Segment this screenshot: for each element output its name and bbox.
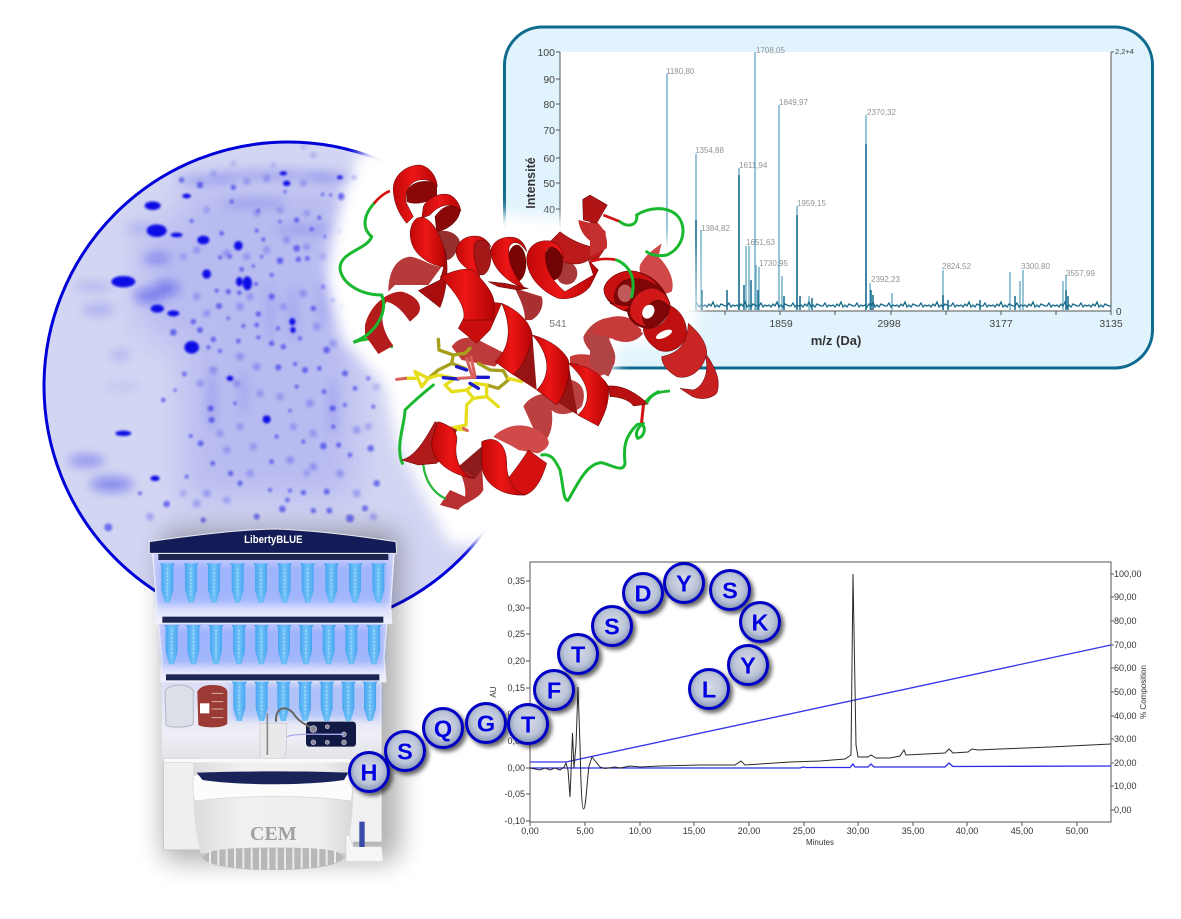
bottom axis labels: 15,00	[683, 826, 705, 836]
right coil	[583, 195, 718, 403]
right axis labels	[1115, 47, 1134, 318]
ring two gap	[640, 302, 657, 321]
bead L: L	[702, 676, 716, 702]
y axis title: Intensité	[524, 157, 538, 209]
right axis labels: 0,00	[1114, 805, 1132, 815]
top coil ring one	[393, 165, 437, 223]
x axis title: m/z (Da)	[811, 333, 861, 348]
panel background	[504, 27, 1152, 368]
bottom axis labels: 45,00	[1011, 826, 1033, 836]
spectrum peaks dark	[696, 144, 1068, 310]
peak labels: 1180,80	[666, 67, 695, 76]
helix ring a interior	[472, 238, 491, 275]
spectrum peaks light	[667, 52, 1066, 310]
plot area	[560, 52, 1111, 311]
reactor white band	[193, 775, 353, 801]
y axis labels: 80	[543, 99, 555, 111]
bottom axis labels: 0,00	[521, 826, 539, 836]
helix ring b	[491, 237, 527, 288]
bead T	[508, 704, 548, 744]
column behind reactor	[197, 758, 353, 848]
left axis labels: 0,00	[507, 763, 525, 773]
central and bottom helices	[402, 300, 648, 495]
ring three gap	[655, 328, 673, 341]
spectrum baseline noise	[695, 302, 1111, 307]
bead S	[386, 732, 424, 770]
product name: LibertyBLUE	[244, 534, 303, 546]
helix ring c	[527, 241, 598, 299]
blue gradient line	[530, 645, 1111, 762]
right axis labels: 10,00	[1114, 781, 1137, 791]
bottom axis labels: 30,00	[847, 826, 869, 836]
bead Y second	[728, 646, 768, 684]
chromatogram frame and ticks	[526, 562, 1114, 826]
y axis labels	[537, 47, 555, 216]
central band start	[440, 269, 494, 320]
bottom helix start	[402, 422, 457, 465]
helix tip	[583, 195, 607, 223]
right axis labels: 100,00	[1114, 569, 1142, 579]
top coil ring two interior	[435, 206, 460, 232]
bead F: F	[547, 678, 561, 704]
peak labels: 3557,99	[1066, 269, 1095, 278]
peak labels: 1611,94	[739, 161, 768, 170]
peptide synthesizer: Liberty Blue	[149, 529, 400, 870]
central helix band two	[532, 335, 569, 405]
left axis labels	[504, 576, 525, 826]
heme and loops	[397, 339, 658, 501]
left axis labels: 0,25	[507, 629, 525, 639]
heme nitrogen bonds	[443, 367, 488, 388]
peak labels: 1849,97	[779, 98, 808, 107]
bead K	[740, 602, 780, 642]
peptide sequence beads	[350, 564, 780, 792]
bottle label	[200, 703, 209, 713]
reactor logo: CEM	[250, 823, 297, 845]
top left and top helices	[388, 165, 606, 320]
bead Y second: Y	[740, 652, 756, 678]
central helix start	[458, 300, 502, 343]
helix ring a	[456, 236, 491, 277]
top helix tip band	[578, 220, 606, 248]
bead D	[624, 574, 662, 612]
reagent tubes row three	[232, 682, 378, 721]
peak labels: 2824,52	[942, 262, 971, 271]
left small coil	[365, 292, 420, 354]
rear panel	[162, 680, 382, 760]
bottom helix band two	[432, 422, 475, 478]
dispensing module	[260, 723, 287, 758]
bottom green loop	[542, 423, 644, 501]
back below horizontal helix	[515, 288, 543, 320]
right axis labels: 90,00	[1114, 592, 1137, 602]
bottom axis labels: 20,00	[738, 826, 760, 836]
bead Q	[424, 708, 462, 748]
back helix lower	[590, 316, 642, 341]
ring three	[643, 305, 687, 351]
black absorbance trace	[530, 574, 1111, 809]
coil tail	[680, 350, 718, 399]
peak labels: 1730,95	[759, 259, 788, 268]
tubing	[276, 708, 313, 729]
x axis labels: 1859	[769, 318, 793, 330]
bead F	[534, 670, 574, 710]
bead G: G	[477, 710, 495, 736]
helix ring c interior	[544, 247, 563, 280]
red link to inner loop	[590, 259, 617, 262]
peak labels: 1708,05	[756, 46, 785, 55]
gel image: 2D electrophoresis	[44, 142, 700, 630]
far loops and left coil	[340, 191, 420, 354]
y axis labels: 60	[543, 153, 555, 165]
helix ring b interior	[507, 245, 526, 282]
y axis labels: 70	[543, 125, 555, 137]
heme front sticks	[405, 372, 522, 430]
bottom axis labels: 35,00	[902, 826, 924, 836]
left axis labels: 0,20	[507, 656, 525, 666]
right link loop	[643, 392, 658, 405]
lower back loop	[423, 465, 445, 498]
x axis labels	[769, 318, 1123, 330]
right axis title: % Composition	[1139, 665, 1148, 719]
faint axis label under halo: 541	[549, 318, 567, 330]
white halo around protein	[326, 145, 700, 545]
bottom axis labels: 10,00	[629, 826, 651, 836]
bottle markings	[212, 693, 223, 718]
central helix arrow	[608, 386, 648, 406]
peak labels	[666, 46, 1095, 284]
bead G	[466, 704, 506, 742]
amber solvent bottle	[197, 685, 227, 727]
bottom helix band three	[482, 439, 525, 495]
back helices centre	[440, 317, 643, 510]
bottom axis title: Minutes	[806, 838, 834, 847]
heme back sticks	[428, 339, 508, 388]
right axis labels: 40,00	[1114, 711, 1137, 721]
bead S second	[592, 606, 632, 646]
x axis labels: 3135	[1099, 318, 1123, 330]
upper wedge	[550, 232, 605, 264]
bead K: K	[752, 610, 769, 636]
left axis labels: -0,05	[504, 789, 525, 799]
bottom axis labels: 25,00	[793, 826, 815, 836]
peak labels: 1354,88	[695, 146, 724, 155]
shelf one	[153, 553, 394, 623]
peak labels: 2392,23	[871, 275, 900, 284]
right axis labels: 80,00	[1114, 616, 1137, 626]
label strips	[158, 554, 388, 680]
reactor navy display	[197, 771, 348, 784]
ring two band	[630, 288, 670, 327]
left axis labels: 0,10	[507, 709, 525, 719]
left axis title: AU	[489, 686, 498, 698]
back right of horizontal helix	[556, 262, 577, 285]
right axis labels: 60,00	[1114, 663, 1137, 673]
back left light helix	[388, 257, 442, 292]
bottom axis labels: 50,00	[1066, 826, 1088, 836]
machine shadow	[162, 530, 400, 862]
peak labels: 1384,82	[701, 224, 730, 233]
top coil ring two	[422, 194, 461, 218]
peak labels: 3300,80	[1021, 262, 1050, 271]
valve panel	[306, 722, 356, 747]
left pedestal	[163, 758, 200, 850]
peak labels: 2370,32	[867, 108, 896, 117]
roof	[149, 529, 397, 553]
clear solvent bottle	[165, 685, 193, 727]
tube glow	[158, 563, 388, 719]
bead Y	[664, 564, 704, 602]
reagent tubes row one	[160, 563, 386, 603]
heme oxygen and iron bonds	[397, 357, 475, 431]
helix back right	[640, 243, 673, 297]
left axis labels: 0,35	[507, 576, 525, 586]
ring one inner light	[618, 285, 632, 302]
y axis labels: 50	[543, 178, 555, 190]
y axis labels: 40	[543, 204, 555, 216]
top coil ring one interior	[407, 181, 437, 203]
fluid lines	[272, 734, 344, 747]
bead S second: S	[604, 614, 620, 640]
y axis labels: 90	[543, 74, 555, 86]
left lower loop	[400, 385, 433, 463]
x axis labels: 2998	[877, 318, 901, 330]
spectrum axes	[556, 52, 1114, 315]
bead L	[690, 670, 728, 708]
bottom connector	[458, 447, 482, 478]
bead D: D	[635, 580, 651, 606]
panel: HPLC chromatogram	[489, 562, 1148, 847]
bottom axis labels: 5,00	[576, 826, 594, 836]
blue baseline trace	[530, 763, 1111, 768]
top coil wedge	[418, 250, 447, 308]
bottom axis labels: 40,00	[956, 826, 978, 836]
left axis labels: 0,05	[507, 736, 525, 746]
bead Y: Y	[676, 570, 692, 596]
bead Q: Q	[434, 716, 452, 742]
inner green loop	[617, 260, 633, 297]
waste sensor base	[346, 835, 383, 862]
sensor column	[359, 822, 365, 847]
peak labels: 1651,63	[746, 238, 775, 247]
right axis labels: 70,00	[1114, 640, 1137, 650]
top coil large band	[410, 217, 446, 267]
reagent tubes row two	[164, 625, 382, 664]
dark connectors	[495, 335, 578, 415]
right axis labels: 0	[1116, 307, 1122, 318]
left axis labels: 0,30	[507, 603, 525, 613]
ring four	[662, 323, 707, 377]
red link	[642, 406, 643, 422]
bead T second	[558, 634, 598, 674]
needle	[265, 713, 270, 755]
bead T: T	[521, 712, 536, 738]
left axis labels: -0,10	[504, 816, 525, 826]
central helix band one	[495, 303, 532, 375]
bead T second: T	[571, 642, 586, 668]
reactor deck	[163, 758, 352, 763]
right axis labels: 20,00	[1114, 758, 1137, 768]
right pedestal	[350, 762, 382, 842]
right axis labels: 50,00	[1114, 687, 1137, 697]
peak labels: 1959,15	[797, 199, 826, 208]
vent stripes	[210, 848, 335, 870]
tail link loop	[647, 391, 670, 403]
reactor body	[193, 762, 353, 853]
x axis labels: 3177	[989, 318, 1013, 330]
bead S third: S	[722, 578, 738, 604]
ring one crescent	[604, 271, 658, 305]
green over left coil	[353, 295, 384, 342]
left green loop	[340, 203, 392, 347]
bottom helix band four	[507, 450, 547, 495]
red link top left	[374, 191, 390, 203]
protein ribbon structure	[340, 165, 718, 510]
back helix lower left	[590, 333, 614, 377]
right axis labels	[1114, 569, 1142, 815]
arrow mark	[610, 303, 632, 311]
bottom axis labels	[521, 826, 1088, 836]
right axis labels: 2,2+4	[1115, 47, 1134, 56]
ring one body	[604, 271, 670, 328]
bead H: H	[361, 760, 377, 786]
red link to top loop	[603, 215, 620, 222]
bead H	[350, 752, 388, 792]
valve ports	[310, 725, 346, 745]
gel spots	[68, 145, 380, 531]
gel disc	[44, 142, 532, 630]
band under tip	[590, 220, 607, 257]
central helix band three	[568, 363, 609, 426]
y axis labels: 100	[537, 47, 555, 59]
panel: mass spectrum	[504, 27, 1152, 368]
reactor vent	[203, 848, 343, 870]
right axis labels: 30,00	[1114, 734, 1137, 744]
back upper helix	[437, 231, 460, 260]
helix link	[488, 282, 528, 290]
left axis labels: 0,15	[507, 683, 525, 693]
bead S third	[710, 570, 750, 610]
top right green loop	[620, 209, 683, 256]
shelf two	[158, 623, 387, 682]
bead S: S	[397, 738, 413, 764]
